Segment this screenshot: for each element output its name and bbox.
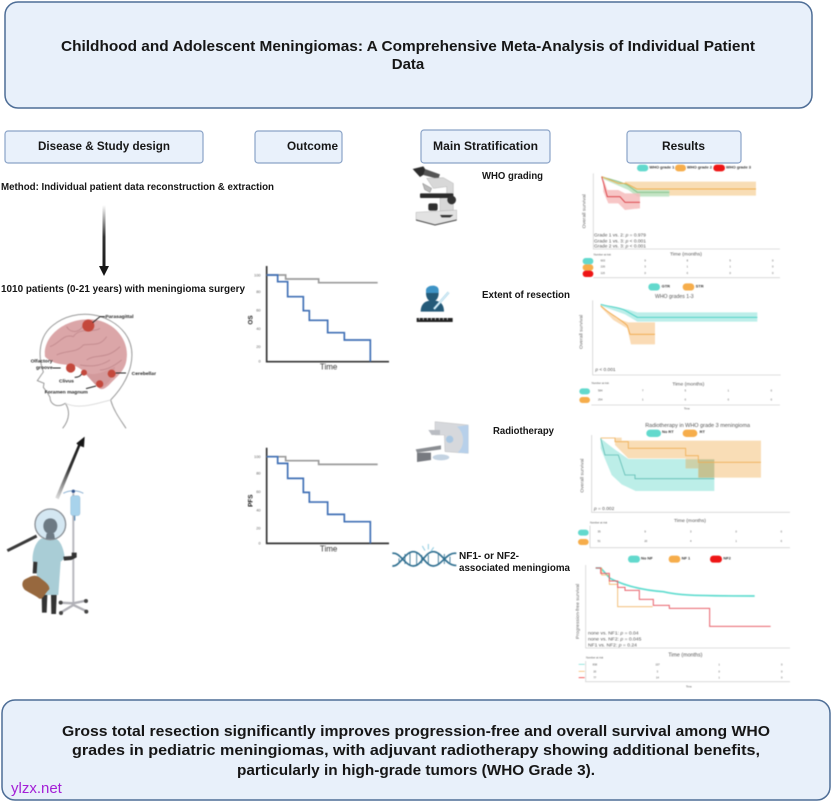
chart: NF progression-free survival: 0 (718, 669, 720, 673)
chart: WHO grade overall survival: 0 (644, 271, 646, 275)
chart: radiotherapy overall survival: 51 (598, 539, 601, 543)
conclusion banner: grades in pediatric meningiomas, with adjuvant radiotherapy showing additional benefits, (72, 743, 760, 759)
chart: radiotherapy overall survival: Number at risk (590, 521, 608, 525)
chart: extent of resection overall survival: WHO grades 1-3 (655, 294, 694, 300)
chart: radiotherapy overall survival: p = 0.002 (593, 506, 615, 512)
heading: Main Stratification: Main Stratification (433, 139, 538, 153)
chart: NF progression-free survival: Number at risk (586, 656, 604, 660)
chart: extent of resection overall survival: 0 (771, 389, 773, 393)
watermark: ylzx.net (11, 780, 63, 797)
chart: radiotherapy overall survival: 1 (735, 539, 737, 543)
legend: GTR and STR (648, 283, 704, 291)
chart: radiotherapy overall survival: 0 (781, 539, 783, 543)
text: patient count: 1010 patients (0-21 years) with meningioma surgery (1, 284, 245, 295)
chart: NF progression-free survival: 137 (655, 662, 660, 666)
legend: NF status: No NF (641, 556, 653, 561)
chart: radiotherapy overall survival: 20 (644, 539, 648, 543)
chart: radiotherapy overall survival: 9 (644, 530, 646, 534)
chart: NF progression-free survival: 1 (718, 662, 720, 666)
chart: NF progression-free survival: NF1 vs. NF2: p = 0.24 (588, 643, 637, 649)
chart: WHO grade overall survival: 0 (687, 271, 689, 275)
heading: Outcome: Outcome (287, 139, 338, 153)
label: NF1 or NF2: associated meningioma (459, 563, 570, 574)
chart: radiotherapy overall survival: Time (months) (674, 518, 706, 524)
chart: WHO grade overall survival: Overall survival (582, 194, 588, 228)
chart: extent of resection overall survival (578, 283, 781, 410)
chart: radiotherapy overall survival: 4 (690, 539, 692, 543)
illustration: child head with meningioma locations: Clivus (59, 378, 74, 384)
chart: PFS Kaplan-Meier sketch: 20 (256, 526, 261, 531)
chart: radiotherapy overall survival: 35 (598, 530, 601, 534)
chart: WHO grade overall survival: 8 (687, 259, 689, 263)
chart: OS Kaplan-Meier sketch: 40 (256, 326, 261, 331)
chart: OS Kaplan-Meier sketch: 80 (256, 289, 261, 294)
chart: extent of resection overall survival: 0 (728, 397, 730, 401)
chart: PFS Kaplan-Meier sketch: 60 (256, 489, 261, 494)
icon: DNA helix (392, 544, 456, 566)
chart: PFS Kaplan-Meier sketch: Time (320, 544, 338, 553)
chart: radiotherapy overall survival: 0 (735, 530, 737, 534)
legend: WHO grades: WHO grade 1 (649, 165, 675, 170)
chart: extent of resection overall survival: p < 0.001 (594, 367, 616, 373)
label: WHO grading: WHO grading (482, 171, 543, 182)
heading: Disease & Study design: Disease & Study design (38, 139, 170, 153)
heading: Main Stratification (421, 130, 550, 163)
chart: WHO grade overall survival: 3 (644, 265, 646, 269)
chart: NF progression-free survival: 3 (657, 669, 659, 673)
chart: extent of resection overall survival: Time (months) (672, 382, 705, 388)
chart: WHO grade overall survival (582, 165, 780, 278)
chart: NF progression-free survival: 77 (593, 676, 597, 680)
title banner (5, 2, 812, 108)
heading: Disease & Study design (5, 131, 203, 163)
chart: extent of resection overall survival: Overall survival (578, 315, 584, 349)
chart: radiotherapy overall survival (578, 423, 790, 548)
chart: WHO grade overall survival: Grade 1 vs. 3: p < 0.001 (594, 238, 646, 244)
heading: Outcome (255, 131, 342, 163)
legend: RT (646, 429, 706, 437)
chart: radiotherapy overall survival: Radiotherapy in WHO grade 3 meningioma (645, 423, 751, 429)
legend: GTR and STR: GTR (662, 283, 670, 288)
legend: WHO grades: WHO grade 2 (687, 165, 713, 170)
chart: WHO grade overall survival: 603 (601, 259, 606, 263)
chart: PFS Kaplan-Meier sketch: 100 (254, 454, 261, 459)
legend: NF status: NF2 (723, 556, 732, 561)
chart: WHO grade overall survival: 9 (644, 259, 646, 263)
chart: NF progression-free survival: 0 (781, 676, 783, 680)
conclusion banner: particularly in high-grade tumors (WHO Grade 3). (237, 763, 595, 779)
chart: OS Kaplan-Meier sketch: 100 (254, 272, 261, 277)
chart: PFS Kaplan-Meier sketch: 0 (258, 540, 261, 545)
chart: WHO grade overall survival: Time (months) (670, 252, 702, 258)
chart: NF progression-free survival: 14 (656, 676, 659, 680)
chart: PFS Kaplan-Meier sketch: 80 (256, 471, 261, 476)
illustration: child head with meningioma locations: Olfactory (31, 359, 53, 365)
chart: OS Kaplan-Meier sketch: 20 (256, 344, 261, 349)
icon: microscope (413, 166, 457, 225)
chart: NF progression-free survival (575, 556, 790, 688)
chart: PFS Kaplan-Meier sketch: PFS (248, 495, 255, 507)
chart: WHO grade overall survival: 0 (772, 265, 774, 269)
chart: NF progression-free survival: none vs. NF2: p = 0.045 (588, 637, 642, 643)
title banner: Data (392, 56, 425, 73)
chart: WHO grade overall survival: 1 (729, 265, 731, 269)
chart: extent of resection overall survival: 254 (598, 397, 603, 401)
chart: WHO grade overall survival: 0 (772, 259, 774, 263)
chart: NF progression-free survival: 838 (593, 662, 598, 666)
chart: NF progression-free survival: none vs. NF1: p = 0.04 (588, 630, 639, 636)
label: NF1 or NF2 (459, 551, 570, 574)
heading: Results (627, 131, 741, 163)
chart: extent of resection overall survival: 7 (642, 389, 644, 393)
conclusion banner: Gross total resection significantly improves progression-free and overall survival among WHO (62, 724, 770, 740)
chart: NF progression-free survival: 1 (718, 676, 720, 680)
chart: extent of resection overall survival: 1 (642, 397, 644, 401)
chart: WHO grade overall survival: 5 (729, 259, 731, 263)
title banner: Childhood and Adolescent Meningiomas: A Comprehensive Meta-Analysis of Individual Patient (61, 38, 755, 55)
chart: NF progression-free survival: 0 (781, 662, 783, 666)
chart: WHO grade overall survival: 1 (687, 265, 689, 269)
chart: extent of resection overall survival: Time (684, 406, 690, 410)
chart: OS Kaplan-Meier sketch: 60 (256, 307, 261, 312)
chart: OS Kaplan-Meier sketch: Time (320, 363, 338, 372)
legend: NF status: NF 1 (682, 556, 691, 561)
illustration: child with IV pole and magnifier (7, 490, 88, 615)
illustration: child head with meningioma locations: groove (36, 365, 53, 371)
chart: WHO grade overall survival: 0 (772, 271, 774, 275)
chart: extent of resection overall survival: 0 (771, 397, 773, 401)
heading: Results: Results (662, 139, 705, 153)
chart: WHO grade overall survival: Grade 1 vs. 2: p = 0.979 (594, 233, 646, 239)
illustration: child head with meningioma locations: Cerebellar (132, 371, 156, 377)
chart: WHO grade overall survival: Grade 2 vs. 3: p < 0.001 (594, 244, 646, 250)
chart: extent of resection overall survival: 584 (598, 389, 603, 393)
chart: NF progression-free survival: Time (months) (668, 652, 703, 658)
illustration: child head with meningioma locations (31, 314, 156, 428)
illustration: child head with meningioma locations: Parasagittal (105, 314, 134, 320)
chart: WHO grade overall survival: Number at risk (594, 252, 612, 256)
conclusion banner (2, 700, 830, 800)
illustration: child head with meningioma locations: Foramen magnum (45, 390, 88, 396)
icon: radiotherapy machine (416, 422, 468, 462)
chart: NF progression-free survival: Progression-free survival (575, 584, 581, 639)
chart: NF progression-free survival: 0 (781, 669, 783, 673)
label: Radiotherapy: Radiotherapy (493, 426, 554, 437)
chart: OS Kaplan-Meier sketch (248, 266, 389, 372)
arrow: method to patients (99, 205, 109, 276)
label: NF1 or NF2: NF1- or NF2- (459, 551, 519, 562)
chart: WHO grade overall survival: 0 (729, 271, 731, 275)
arrow: patient to brain (55, 437, 85, 499)
legend: NF status (628, 556, 732, 563)
legend: GTR and STR: STR (696, 283, 704, 288)
chart: radiotherapy overall survival: 0 (781, 530, 783, 534)
chart: radiotherapy overall survival: 3 (690, 530, 692, 534)
chart: NF progression-free survival: 20 (593, 669, 597, 673)
chart: NF progression-free survival: Time (686, 684, 692, 688)
chart: extent of resection overall survival: Number at risk (592, 381, 610, 385)
legend: RT: RT (700, 429, 706, 434)
legend: WHO grades: WHO grade 3 (726, 165, 752, 170)
label: Extent of resection: Extent of resection (482, 290, 570, 301)
chart: extent of resection overall survival: 5 (685, 389, 687, 393)
legend: RT: No RT (662, 429, 674, 434)
chart: OS Kaplan-Meier sketch: 0 (258, 359, 261, 364)
chart: extent of resection overall survival: 0 (685, 397, 687, 401)
chart: OS Kaplan-Meier sketch: OS (248, 315, 255, 325)
legend: WHO grades (637, 165, 752, 171)
icon: surgeon with scalpel and ruler (417, 286, 453, 322)
chart: PFS Kaplan-Meier sketch (248, 448, 389, 553)
chart: WHO grade overall survival: 226 (601, 265, 606, 269)
chart: extent of resection overall survival: 1 (728, 389, 730, 393)
text: method: Method: Individual patient data reconstruction & extraction (1, 182, 274, 193)
chart: radiotherapy overall survival: Overall survival (579, 459, 585, 493)
chart: WHO grade overall survival: 115 (601, 271, 605, 275)
chart: PFS Kaplan-Meier sketch: 40 (256, 508, 261, 513)
